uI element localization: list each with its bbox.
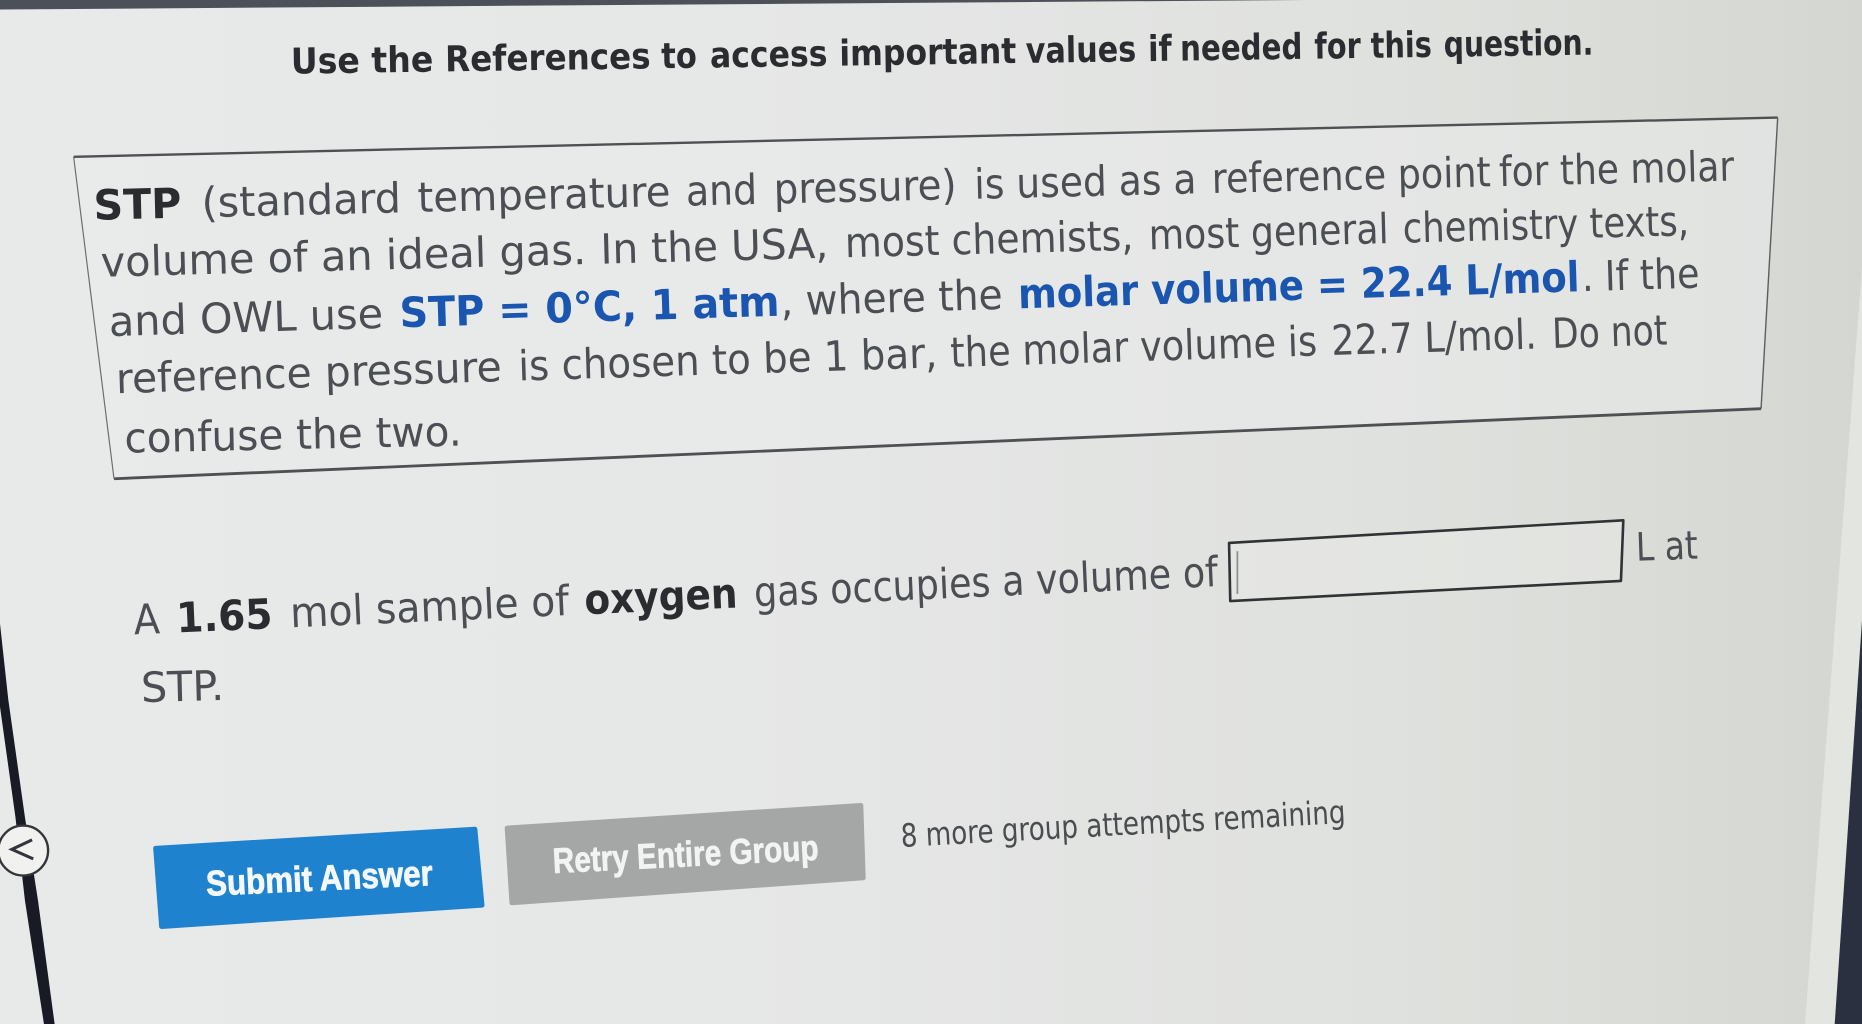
STP explanation text: volume of an ideal gas.	[100, 225, 587, 287]
STP explanation text: and	[685, 165, 758, 216]
question text	[132, 547, 1220, 712]
STP explanation text: and OWL use	[108, 289, 384, 346]
retry entire group button: Retry Entire Group	[552, 828, 819, 881]
answer input box	[1229, 520, 1623, 601]
STP explanation text: Do not	[1551, 305, 1668, 358]
reference instruction heading	[290, 23, 1594, 83]
reference instruction heading: Use the	[290, 40, 434, 83]
top screen bezel	[0, 0, 1306, 10]
unit label: L at	[1635, 524, 1698, 571]
reference instruction heading: if	[1148, 29, 1173, 70]
retry entire group button	[507, 805, 863, 903]
STP explanation text: . If the	[1581, 249, 1700, 301]
reference instruction heading: question.	[1443, 23, 1594, 66]
STP explanation text: (standard	[201, 173, 402, 227]
STP explanation text: In the USA,	[600, 219, 829, 274]
STP explanation text: , where the	[780, 270, 1003, 326]
STP explanation text: most general	[1148, 204, 1389, 259]
left screen bezel line	[0, 624, 55, 1024]
STP explanation text: the molar volume is	[950, 316, 1318, 377]
STP explanation text: most chemists,	[844, 211, 1134, 267]
question text: gas occupies a volume of	[753, 547, 1220, 617]
STP explanation text: reference pressure	[115, 342, 502, 403]
STP explanation text: temperature	[417, 167, 671, 222]
reference instruction heading: important	[839, 31, 1017, 75]
reference instruction heading: access	[710, 34, 828, 77]
STP explanation text: STP	[93, 179, 182, 230]
attempts remaining text: 8 more group attempts remaining	[900, 793, 1346, 855]
STP explanation text: STP = 0°C, 1 atm	[399, 277, 780, 337]
question text: mol sample of	[289, 576, 571, 637]
STP explanation text: 22.7 L/mol.	[1331, 310, 1537, 365]
STP explanation text: molar volume = 22.4 L/mol	[1017, 252, 1580, 318]
submit answer button	[156, 829, 482, 927]
reference instruction heading: References	[445, 36, 651, 80]
question text: oxygen	[583, 568, 738, 624]
icon: back chevron tab	[0, 826, 48, 876]
submit answer button: Submit Answer	[205, 853, 434, 904]
question text: 1.65	[175, 589, 273, 642]
question text: A	[132, 594, 161, 644]
STP explanation text: confuse the two.	[124, 407, 462, 463]
STP explanation text: pressure)	[773, 160, 957, 213]
STP explanation text: is chosen to be 1 bar,	[518, 328, 938, 391]
STP explanation text: reference point	[1211, 147, 1491, 203]
STP explanation text: is used as a	[974, 154, 1197, 209]
STP explanation text	[93, 142, 1735, 463]
question text: STP.	[140, 661, 225, 712]
STP explanation text: chemistry texts,	[1402, 196, 1690, 253]
STP explanation text: for the molar	[1498, 142, 1735, 196]
reference instruction heading: values	[1025, 29, 1136, 72]
reference instruction heading: for this	[1314, 25, 1432, 68]
panel: STP information box	[74, 118, 1778, 479]
reference instruction heading: to	[661, 36, 697, 77]
reference instruction heading: needed	[1180, 27, 1303, 70]
